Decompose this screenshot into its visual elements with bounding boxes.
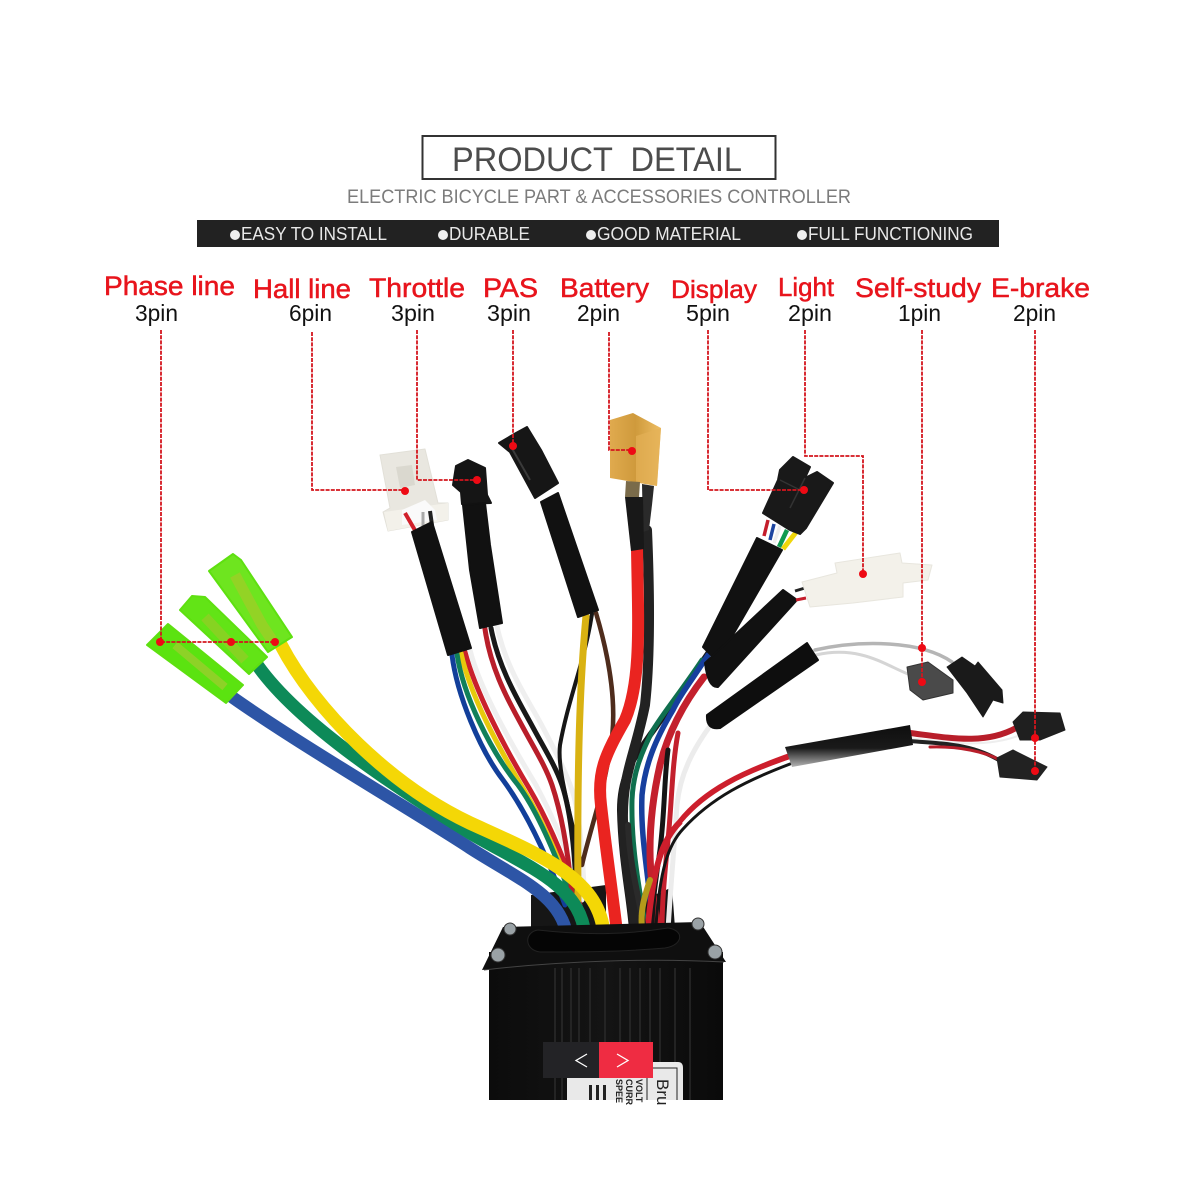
thin wires bundle bbox=[232, 530, 790, 935]
label: throttle: Throttle bbox=[369, 273, 465, 303]
leader: PAS bbox=[509, 330, 517, 450]
controller mounting bracket bbox=[531, 885, 675, 932]
label: battery: 2pin bbox=[577, 300, 620, 326]
benefits bar bbox=[197, 220, 999, 247]
label: self-study: Self-study bbox=[855, 273, 982, 303]
label: display: Display bbox=[671, 276, 758, 304]
label: throttle: 3pin bbox=[391, 300, 435, 326]
subtitle: ELECTRIC BICYCLE PART & ACCESSORIES CONTROLLER bbox=[347, 186, 851, 208]
thick blue phase wire bbox=[232, 697, 567, 935]
label: phase line: 3pin bbox=[135, 300, 178, 326]
label: light: 2pin bbox=[788, 300, 832, 326]
label: throttle bbox=[369, 273, 465, 326]
e-brake connector upper bbox=[1013, 712, 1065, 740]
leader: e-brake bbox=[1031, 330, 1039, 775]
rating label bbox=[567, 1062, 683, 1105]
self-study gray connector bbox=[907, 662, 953, 700]
label: self-study: 1pin bbox=[898, 300, 941, 326]
e-brake connector lower bbox=[997, 750, 1047, 780]
hall sleeve bbox=[412, 522, 471, 655]
label: self-study bbox=[855, 273, 982, 326]
gallery next button bbox=[599, 1042, 653, 1078]
leader: hall line bbox=[312, 332, 409, 495]
battery red wire bbox=[600, 548, 638, 932]
leader: self-study bbox=[918, 330, 926, 686]
display and light wires bbox=[620, 652, 709, 930]
label: PAS: 3pin bbox=[487, 300, 531, 326]
throttle sleeve bbox=[463, 503, 502, 628]
label: hall line bbox=[253, 274, 351, 326]
PAS sleeve bbox=[541, 493, 598, 617]
callout leader lines bbox=[156, 330, 1039, 775]
label: e-brake: E-brake bbox=[991, 273, 1090, 303]
rating label: SPEE bbox=[614, 1079, 624, 1103]
phase line green connectors bbox=[147, 554, 292, 703]
title box: PRODUCT DETAIL bbox=[452, 141, 742, 179]
battery black wire bbox=[623, 530, 649, 932]
label: hall line: 6pin bbox=[289, 300, 332, 326]
label: light bbox=[778, 272, 835, 326]
plate edge bbox=[484, 960, 724, 970]
controller body bbox=[482, 918, 726, 1105]
label: light: Light bbox=[778, 272, 835, 302]
light sleeve bbox=[705, 590, 797, 687]
benefits bar: GOOD MATERIAL bbox=[597, 223, 741, 244]
throttle wires bbox=[485, 626, 584, 900]
self-study sleeve bbox=[707, 643, 818, 728]
label: display: 5pin bbox=[686, 300, 730, 326]
label: battery bbox=[560, 273, 650, 326]
PAS connector bbox=[499, 427, 558, 498]
label: phase line: Phase line bbox=[104, 271, 235, 301]
label: PAS bbox=[483, 273, 538, 326]
aluminium case bbox=[489, 952, 723, 1100]
rating label: CURR bbox=[624, 1079, 634, 1105]
thick yellow phase wire bbox=[281, 645, 604, 935]
top plate bbox=[482, 922, 726, 970]
label: battery: Battery bbox=[560, 273, 650, 303]
label: PAS: PAS bbox=[483, 273, 538, 303]
label: display bbox=[671, 276, 758, 326]
e-brake wires bbox=[648, 756, 790, 925]
throttle connector bbox=[453, 460, 491, 504]
hall connector bbox=[380, 449, 448, 532]
thick green phase wire bbox=[258, 666, 585, 935]
self-study wires bbox=[815, 644, 952, 674]
battery connector bbox=[610, 413, 661, 551]
benefits bar: EASY TO INSTALL bbox=[241, 223, 387, 244]
label: hall line: Hall line bbox=[253, 274, 351, 304]
wire labels bbox=[104, 271, 1090, 326]
leader: light bbox=[805, 330, 867, 578]
screws bbox=[491, 918, 722, 962]
gallery previous button bbox=[543, 1042, 599, 1078]
rubber grommet bbox=[528, 928, 680, 952]
label: e-brake: 2pin bbox=[1013, 300, 1056, 326]
display sleeve bbox=[703, 538, 782, 656]
leader: phase line bbox=[156, 330, 279, 646]
light connector bbox=[795, 553, 932, 607]
self-study white wire bbox=[668, 722, 713, 930]
rating label: Bru bbox=[653, 1079, 672, 1105]
e-brake sleeve bbox=[785, 725, 913, 767]
PAS wires bbox=[560, 613, 613, 900]
label: e-brake bbox=[991, 273, 1090, 326]
cooling fins bbox=[555, 968, 690, 1100]
hall wires bbox=[452, 650, 582, 905]
e-brake wires to connectors bbox=[910, 728, 1018, 762]
label: phase line bbox=[104, 271, 235, 326]
rating label: VOLT bbox=[634, 1079, 644, 1103]
leader: display bbox=[708, 330, 808, 494]
benefits bar: FULL FUNCTIONING bbox=[808, 223, 973, 244]
display connector bbox=[763, 457, 833, 549]
leader: throttle bbox=[417, 330, 481, 484]
self-study black connector bbox=[947, 657, 1003, 717]
leader: battery bbox=[609, 332, 636, 455]
benefits bar: DURABLE bbox=[449, 223, 530, 244]
